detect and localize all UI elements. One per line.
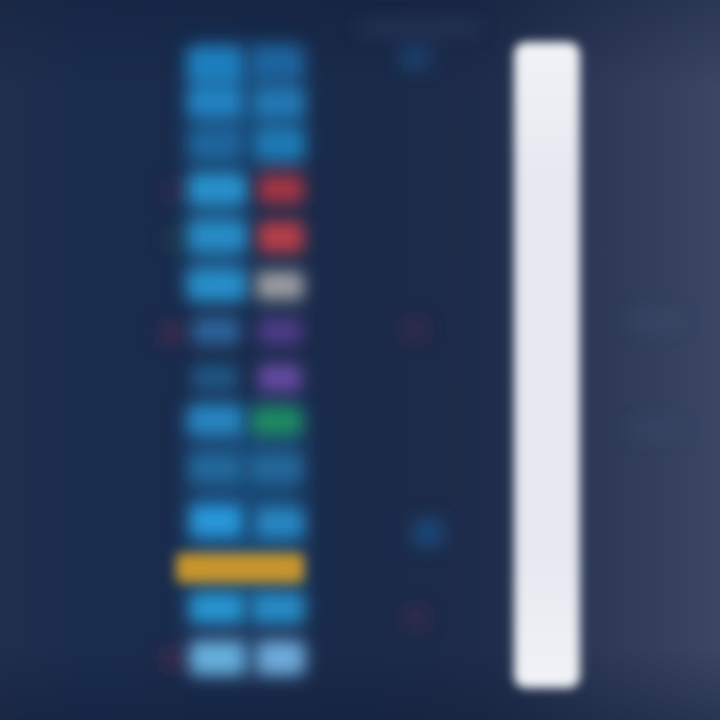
cell glow [188,45,304,674]
small accent marks [162,24,680,666]
right column: coloured cells [250,47,304,674]
left column: blue cells [188,47,246,674]
highlighted amber row [176,553,304,583]
white column [514,42,580,688]
